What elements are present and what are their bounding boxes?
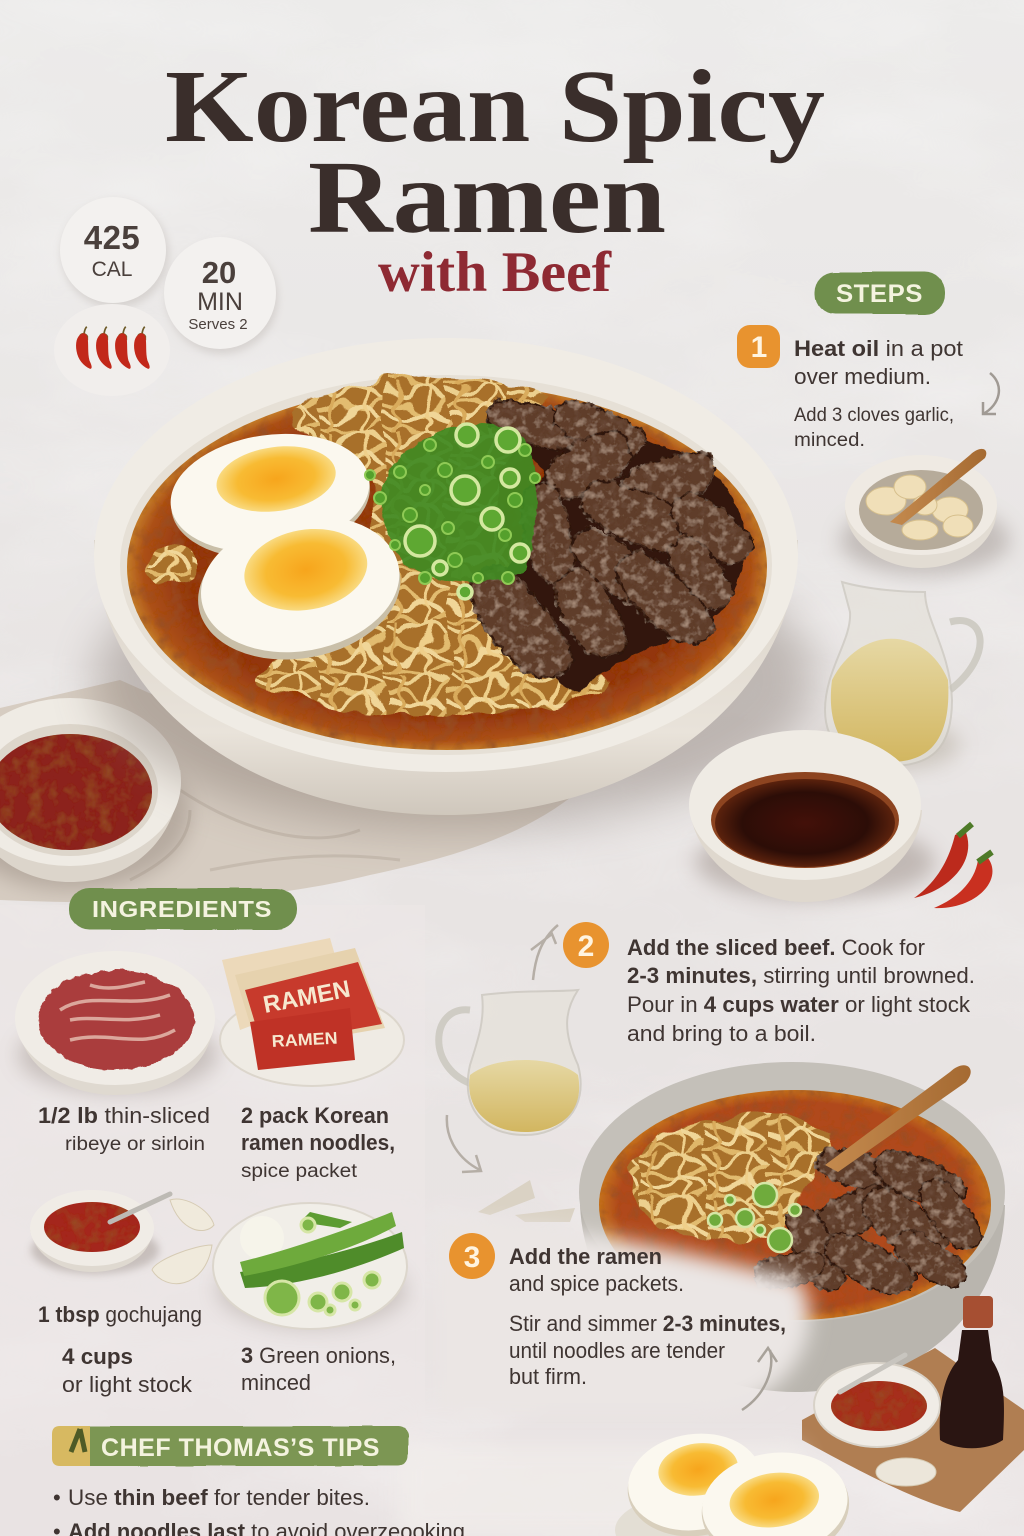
badge: spice level (54, 304, 170, 396)
egg: upper half (163, 422, 378, 570)
main ramen bowl (94, 338, 815, 830)
red chili peppers (914, 824, 992, 908)
boiled eggs on plate (400, 1425, 856, 1536)
title (165, 49, 825, 304)
step 3 text: and spice packets. (509, 1271, 684, 1296)
ingredient: gochujang (30, 1190, 202, 1327)
small bowl of sauce (814, 1355, 940, 1447)
step 3 number (449, 1233, 495, 1279)
step 3 text: until noodles are tender (509, 1338, 725, 1363)
ingredient label: gochujang: 1 tbsp gochujang (38, 1302, 202, 1327)
wooden board (802, 1348, 1024, 1512)
pot beef (751, 1144, 990, 1304)
step 1 text (794, 336, 963, 451)
pot onions (708, 1183, 801, 1252)
ingredient: ramen packs: RAMEN (261, 976, 353, 1019)
ingredient label: beef (38, 1103, 210, 1155)
ingredient label: green onions: 3 Green onions, (241, 1343, 396, 1368)
icon: chef figure (71, 1429, 85, 1452)
step 2 text: 2-3 minutes, stirring until browned. (627, 963, 975, 988)
section heading: ingredients: INGREDIENTS (92, 896, 272, 922)
ingredient label: ramen: spice packet (241, 1161, 358, 1182)
step 1 text: minced. (794, 430, 865, 451)
badge: calories: 425 (84, 219, 140, 256)
garlic cloves (152, 1199, 214, 1284)
step 1 (737, 325, 963, 451)
step 2 number (563, 922, 609, 968)
egg: lower half (186, 501, 412, 675)
arrow: to pot (447, 1115, 481, 1172)
ingredient label: ramen: 2 pack Korean (241, 1103, 389, 1128)
step 2 (563, 922, 975, 1046)
garlic clove (876, 1458, 936, 1486)
step 3 number: 3 (464, 1241, 480, 1274)
ingredient label: ramen: ramen noodles, (241, 1130, 395, 1155)
bowl: chili sauce (689, 730, 935, 902)
ingredient label: beef: ribeye or sirloin (65, 1134, 205, 1155)
section heading: chef tips (52, 1426, 408, 1466)
step 1 text: Heat oil in a pot (794, 336, 963, 361)
bowl: minced garlic (840, 449, 1010, 576)
section heading: chef tips: CHEF THOMAS’S TIPS (101, 1434, 380, 1462)
badge: time and servings (164, 237, 278, 354)
panel: ingredients background (0, 905, 425, 1440)
step 3 text: Add the ramen (509, 1244, 662, 1269)
tips list: Use thin beef for tender bites. (68, 1485, 370, 1510)
napkin (0, 680, 580, 902)
ramen pot (579, 1062, 1005, 1392)
badge: calories (60, 197, 169, 308)
step 3 text (509, 1244, 786, 1389)
arrow: step 2 (531, 925, 558, 980)
step 1 number: 1 (751, 331, 767, 364)
ingredient label: green onions: minced (241, 1370, 311, 1395)
beef shadow base (478, 412, 746, 692)
section heading: ingredients (69, 888, 297, 930)
badge: time and servings: Serves 2 (188, 316, 248, 333)
step 3 text: but firm. (509, 1364, 587, 1389)
tips list: • (53, 1485, 61, 1510)
ingredient label: beef: 1/2 lb thin-sliced (38, 1103, 210, 1128)
step 1 text: Add 3 cloves garlic, (794, 405, 954, 426)
glass jug of stock (439, 990, 581, 1135)
green onions (365, 424, 540, 599)
garlic skins (478, 1180, 575, 1222)
ingredient label: green onions (241, 1343, 396, 1395)
broth (127, 384, 767, 750)
title: Ramen (308, 140, 666, 255)
title: with Beef (378, 241, 612, 304)
ingredient label: stock (62, 1344, 193, 1397)
ingredient: beef (15, 951, 218, 1155)
arrow: step 1 (983, 373, 999, 414)
title: Korean Spicy (165, 49, 825, 164)
step 3 (449, 1233, 786, 1389)
bowl: gochujang (0, 698, 190, 890)
ingredient: ramen packs (220, 938, 404, 1182)
arrow: step 3 (742, 1348, 777, 1410)
step 1 number (737, 325, 780, 368)
pot noodles (625, 1115, 830, 1245)
badge: calories: CAL (92, 258, 132, 281)
section heading: steps: STEPS (836, 280, 923, 308)
beef slices (453, 394, 762, 693)
noodles (144, 376, 610, 716)
wooden spoon (825, 1065, 971, 1172)
step 2 number: 2 (578, 930, 594, 963)
section heading: steps (815, 272, 945, 314)
ingredient label: stock: or light stock (62, 1372, 193, 1397)
glass jug of oil (820, 582, 980, 770)
step 1 text: over medium. (794, 364, 931, 389)
step 2 text: Add the sliced beef. Cook for (627, 935, 925, 960)
badge: time and servings: MIN (197, 288, 243, 316)
step 2 text (627, 935, 975, 1046)
soy sauce bottle (940, 1296, 1004, 1448)
step 2 text: Pour in 4 cups water or light stock (627, 992, 971, 1017)
badge: time and servings: 20 (202, 255, 236, 290)
ingredient label: ramen (241, 1103, 395, 1182)
step 3 text: Stir and simmer 2-3 minutes, (509, 1311, 786, 1336)
ingredient: green onions (213, 1203, 407, 1395)
step 2 text: and bring to a boil. (627, 1021, 816, 1046)
ingredient label: stock: 4 cups (62, 1344, 133, 1369)
text fade over pot (440, 1222, 810, 1410)
ingredient: ramen packs: RAMEN (271, 1029, 338, 1051)
tips list (53, 1485, 465, 1536)
